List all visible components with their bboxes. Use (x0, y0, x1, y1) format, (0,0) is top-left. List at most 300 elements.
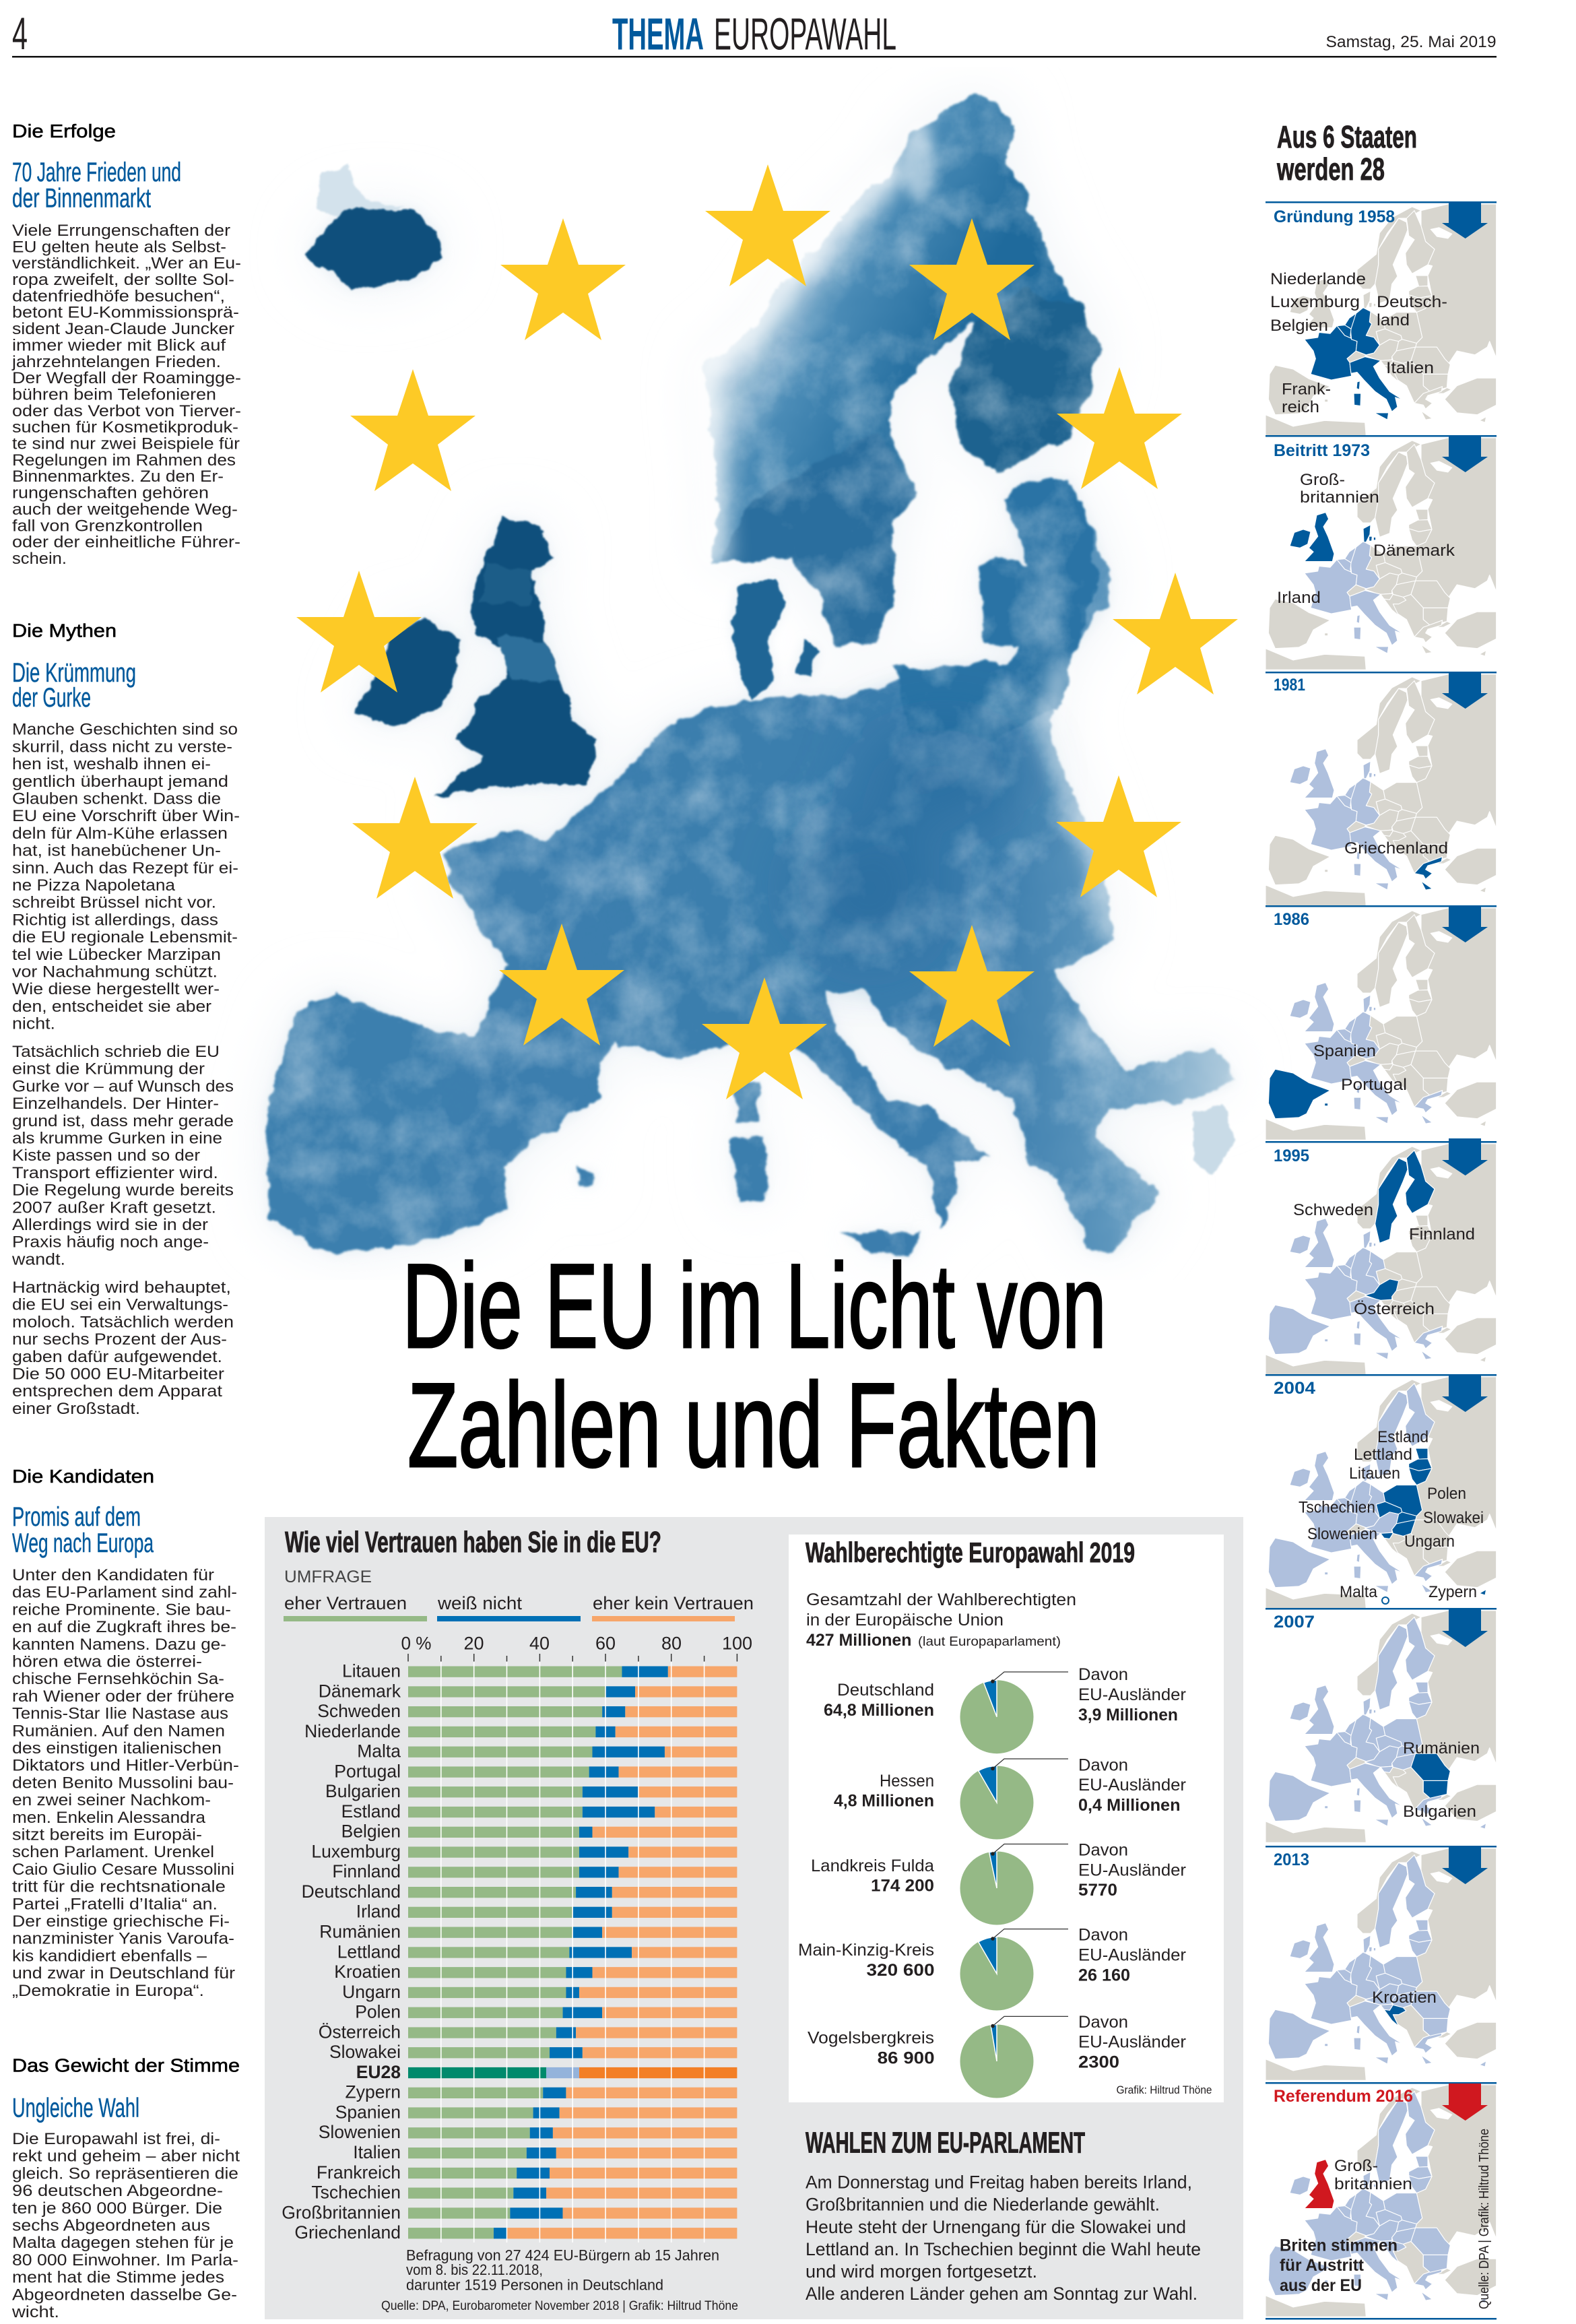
country labels: Belgien (1270, 317, 1328, 335)
row: Luxemburg (311, 1841, 737, 1861)
body text: kannten Namens. Dazu ge- (12, 1636, 226, 1654)
illustration: watercolour map of Europe (266, 96, 1236, 1257)
body text: skurril, dass nicht zu verste- (12, 738, 232, 756)
row: Deutschland pie: Davon (1078, 1665, 1128, 1684)
body text: oder der einheitliche Führer- (12, 534, 240, 552)
country label: Griechenland (1344, 839, 1448, 858)
row: Dänemark (319, 1681, 737, 1701)
arrow (1442, 1138, 1488, 1175)
legend (284, 1593, 754, 1621)
year label: 1995 (1274, 1147, 1309, 1165)
block body: Lettland an. In Tschechien beginnt die Wahl heute (806, 2239, 1201, 2259)
sidebar heading: Aus 6 Staaten (1277, 119, 1417, 154)
body text: „Demokratie in Europa“. (12, 1982, 204, 2000)
body text: nanzminister Yanis Varoufa- (12, 1930, 234, 1948)
kicker: Die Kandidaten (12, 1466, 154, 1487)
block body: Am Donnerstag und Freitag haben bereits Irland, (806, 2172, 1192, 2193)
panel: survey chart Wie viel Vertrauen (282, 1526, 754, 2313)
year label: 1981 (1274, 676, 1305, 695)
row: Frankreich (317, 2162, 737, 2183)
panel: 1986 (1266, 905, 1497, 1140)
body text: ten je 860 000 Bürger. Die (12, 2199, 222, 2218)
body text (11, 2130, 240, 2321)
country labels: Finnland (1409, 1225, 1475, 1244)
source line: Quelle: DPA, Eurobarometer November 2018 | Grafik: Hiltrud Thöne (381, 2298, 738, 2313)
body text: sinn. Auch das Rezept für ei- (12, 859, 238, 877)
row: EU28 (356, 2062, 737, 2082)
headline (12, 658, 136, 713)
country labels (1270, 270, 1447, 416)
section subtitle: EUROPAWAHL (714, 9, 896, 59)
block body: und wird morgen fortgesetzt. (806, 2261, 1037, 2282)
arrow (1442, 672, 1488, 709)
country labels (1313, 1042, 1407, 1094)
body text: Tennis-Star Ilie Nastase aus (12, 1705, 228, 1723)
row: Italien: Italien (353, 2142, 401, 2162)
callout (1280, 2236, 1398, 2295)
body text: vor Nachahmung schützt. (12, 963, 218, 981)
row: Litauen: Litauen (342, 1661, 401, 1681)
body text: chische Fernsehköchin Sa- (12, 1670, 224, 1688)
country labels: Schweden (1293, 1201, 1373, 1219)
body text: nur sechs Prozent der Aus- (12, 1330, 227, 1349)
row: EU28: EU28 (356, 2062, 401, 2082)
body text: Unter den Kandidaten für (12, 1566, 214, 1584)
row: Deutschland pie: 3,9 Millionen (1078, 1706, 1178, 1724)
body text: einer Großstadt. (12, 1400, 140, 1418)
body text: hören etwa die österrei- (12, 1653, 202, 1671)
body text: entsprechen dem Apparat (12, 1382, 222, 1400)
bar chart rows (282, 1661, 737, 2242)
body text: moloch. Tatsächlich werden (12, 1313, 234, 1331)
body text: Kiste passen und so der (12, 1147, 200, 1165)
block body (806, 2172, 1201, 2304)
survey note: darunter 1519 Personen in Deutschland (406, 2277, 663, 2294)
body text: Diktators und Hitler-Verbün- (12, 1757, 239, 1775)
body text: Regelungen im Rahmen des (12, 451, 236, 470)
arrow (1442, 202, 1488, 238)
row: Landkreis Fulda pie (811, 1841, 1186, 1925)
block body: Alle anderen Länder gehen am Sonntag zur Wahl. (806, 2284, 1197, 2304)
body text: sident Jean-Claude Juncker (12, 320, 234, 338)
row: Polen: Polen (355, 2002, 401, 2022)
body text: Viele Errungenschaften der (12, 222, 230, 240)
row: Dänemark: Dänemark (319, 1681, 401, 1701)
map (1266, 1144, 1497, 1376)
row: Schweden: Schweden (317, 1701, 401, 1721)
country label: Kroatien (1372, 1989, 1437, 2007)
row: Hessen pie: Hessen (880, 1772, 934, 1790)
row: Schweden (317, 1701, 737, 1721)
panel: 2007 (1266, 1608, 1497, 1842)
section title: THEMA (612, 9, 704, 59)
article: Die Erfolge (11, 121, 241, 568)
country labels: Litauen (1349, 1464, 1400, 1483)
country labels: Rumänien (1403, 1739, 1480, 1757)
row: Slowenien: Slowenien (319, 2122, 401, 2142)
body text: deten Benito Mussolini bau- (12, 1774, 234, 1792)
row: Kroatien: Kroatien (334, 1962, 401, 1982)
map (1266, 908, 1497, 1140)
row: Slowakei (329, 2042, 737, 2062)
row: Großbritannien: Großbritannien (282, 2202, 401, 2222)
axis labels (401, 1634, 752, 1654)
body text: bühren beim Telefonieren (12, 385, 216, 404)
headline: der Binnenmarkt (12, 183, 151, 213)
total electorate text: 427 Millionen (806, 1631, 912, 1650)
axis labels: 80 (661, 1634, 682, 1654)
legend: weiß nicht (437, 1593, 523, 1613)
row: Italien (353, 2142, 737, 2162)
year label: 2004 (1274, 1379, 1315, 1398)
map (1266, 1848, 1497, 2080)
row: Irland (356, 1902, 737, 1922)
main title: Die EU im Licht von (402, 1239, 1107, 1373)
row: Slowenien (319, 2122, 737, 2142)
map (1266, 1377, 1497, 1609)
body text: gleich. So repräsentieren die (12, 2164, 238, 2183)
body text: Einzelhandels. Der Hinter- (12, 1095, 219, 1113)
body text: des einstigen italienischen (12, 1739, 222, 1757)
row: Zypern (346, 2082, 737, 2102)
row: Landkreis Fulda pie: Landkreis Fulda (811, 1857, 934, 1875)
row: Zypern: Zypern (346, 2082, 401, 2102)
year label: Referendum 2016 (1274, 2087, 1413, 2106)
row: Landkreis Fulda pie: 5770 (1078, 1881, 1117, 1900)
body text: ment hat die Stimme jedes (12, 2269, 224, 2287)
callout: für Austritt (1280, 2256, 1365, 2275)
row: Vogelsbergkreis pie (808, 2013, 1186, 2098)
axis labels: 40 (529, 1634, 550, 1654)
row: Portugal (334, 1761, 737, 1781)
row: Großbritannien (282, 2202, 737, 2222)
body text: deln für Alm-Kühe erlassen (12, 825, 228, 843)
row: Belgien: Belgien (341, 1821, 401, 1842)
body text: nicht. (12, 1015, 55, 1033)
row: Bulgarien: Bulgarien (325, 1781, 401, 1801)
panel: Wahlberechtigte Europawahl 2019 (789, 1535, 1224, 2102)
body text: Abgeordneten dasselbe Ge- (12, 2286, 237, 2304)
row: Vogelsbergkreis pie: Vogelsbergkreis (808, 2029, 934, 2048)
body text: Allerdings wird sie in der (12, 1216, 208, 1234)
country labels: Malta (1340, 1583, 1377, 1601)
body text: gaben dafür aufgewendet. (12, 1348, 222, 1366)
row: Österreich (319, 2022, 737, 2042)
body text: hen ist, weshalb ihnen ei- (12, 755, 211, 773)
body text (12, 1566, 239, 2000)
body text: tel wie Lübecker Marzipan (12, 946, 221, 964)
body text: immer wieder mit Blick auf (12, 336, 226, 354)
row: Lettland (337, 1941, 737, 1962)
EU stars (296, 164, 1238, 1099)
body text: Die Regelung wurde bereits (12, 1182, 234, 1200)
body text: schreibt Brüssel nicht vor. (12, 894, 216, 912)
total electorate text: in der Europäische Union (806, 1611, 1004, 1629)
row: Griechenland: Griechenland (294, 2222, 401, 2242)
country labels: Zypern (1429, 1583, 1477, 1601)
callout: aus der EU (1280, 2276, 1362, 2295)
body text: Partei „Fratelli d’Italia“ an. (12, 1895, 218, 1913)
body text: gentlich überhaupt jemand (12, 773, 228, 791)
body text: Tatsächlich schrieb die EU (12, 1043, 220, 1061)
country labels: Polen (1427, 1485, 1466, 1503)
main title: Zahlen und Fakten (407, 1358, 1100, 1492)
row: Litauen (342, 1661, 737, 1681)
body text: Hartnäckig wird behauptet, (12, 1279, 231, 1297)
body text: 96 deutschen Abgeordne- (12, 2182, 223, 2200)
body text: sitzt bereits im Europäi- (12, 1826, 202, 1844)
year label: 2013 (1274, 1850, 1309, 1869)
country labels: Bulgarien (1403, 1803, 1476, 1821)
body text: Praxis häufig noch ange- (12, 1233, 209, 1252)
country labels: Niederlande (1270, 270, 1366, 288)
map (1266, 438, 1497, 670)
country labels: Groß- (1300, 471, 1345, 489)
body text: auch der weitgehende Weg- (12, 501, 238, 519)
headline: Promis auf dem (12, 1502, 141, 1532)
callout: Briten stimmen (1280, 2236, 1398, 2255)
body text: Der Wegfall der Roamingge- (12, 369, 241, 387)
body text: tritt für die rechtsnationale (12, 1878, 226, 1896)
row: Deutschland pie (824, 1665, 1186, 1753)
country labels (1299, 1428, 1484, 1601)
survey note: Befragung von 27 424 EU-Bürgern ab 15 Jahren (406, 2247, 719, 2263)
body text: als krumme Gurken in eine (12, 1129, 222, 1148)
row: Malta (357, 1741, 737, 1762)
body text: Die Europawahl ist frei, di- (12, 2130, 220, 2148)
arrow (1442, 1846, 1488, 1884)
year label: Beitritt 1973 (1274, 441, 1370, 460)
body text: ne Pizza Napoletana (12, 876, 176, 895)
body text: Gurke vor – auf Wunsch des (12, 1077, 234, 1095)
body text: EU eine Vorschrift über Win- (12, 807, 240, 825)
country label: britannien (1334, 2175, 1412, 2193)
country labels: britannien (1300, 488, 1379, 507)
body text: schein. (12, 550, 67, 568)
panel: Gründung 1958 (1266, 201, 1497, 436)
masthead (12, 8, 1497, 59)
panel heading: Wahlberechtigte Europawahl 2019 (806, 1537, 1135, 1568)
body text: 2007 außer Kraft gesetzt. (12, 1198, 216, 1217)
kicker: Das Gewicht der Stimme (12, 2055, 240, 2076)
body text: und zwar in Deutschland für (12, 1964, 235, 1982)
map (1266, 674, 1497, 906)
country labels: Spanien (1313, 1042, 1376, 1060)
article: Die Kandidaten (12, 1466, 239, 2000)
row: Niederlande: Niederlande (304, 1721, 401, 1741)
body text: Rumänien. Auf den Namen (12, 1722, 225, 1740)
body text: Caio Giulio Cesare Mussolini (12, 1861, 234, 1879)
country labels: Slowenien (1307, 1525, 1377, 1543)
body text: rungenschaften gehören (12, 484, 209, 503)
row: Niederlande (304, 1721, 737, 1741)
headline: 70 Jahre Frieden und (12, 158, 181, 187)
year label: 2007 (1274, 1613, 1315, 1632)
row: Hessen pie: 4,8 Millionen (834, 1792, 934, 1811)
row: Main-Kinzig-Kreis pie (798, 1926, 1186, 2010)
body text: Malta dagegen stehen für je (12, 2234, 234, 2252)
row: Spanien (335, 2102, 737, 2122)
body text: die EU regionale Lebensmit- (12, 928, 238, 946)
body text: wandt. (11, 1250, 65, 1268)
legend: eher kein Vertrauen (593, 1593, 754, 1613)
axis labels: 60 (595, 1634, 616, 1654)
body text: Die 50 000 EU-Mitarbeiter (12, 1365, 224, 1384)
body text: das EU-Parlament sind zahl- (12, 1584, 237, 1602)
row: Bulgarien (325, 1781, 737, 1801)
row: Ungarn: Ungarn (342, 1982, 401, 2002)
row: Slowakei: Slowakei (329, 2042, 401, 2062)
body text: suchen für Kosmetikproduk- (12, 418, 238, 437)
arrow (1442, 2084, 1488, 2121)
body text: Richtig ist allerdings, dass (12, 911, 218, 929)
body text: rah Wiener oder der frühere (12, 1687, 234, 1706)
body text: en auf die Zugkraft ihres be- (12, 1618, 236, 1636)
axis labels: 100 (722, 1634, 752, 1654)
row: Österreich: Österreich (319, 2022, 401, 2042)
headline (12, 1502, 154, 1558)
row: Polen (355, 2002, 737, 2022)
country labels (1403, 1739, 1480, 1821)
body text: schen Parlament. Urenkel (12, 1843, 214, 1861)
row: Frankreich: Frankreich (317, 2162, 401, 2183)
body text: Glauben schenkt. Dass die (12, 789, 221, 808)
row: Luxemburg: Luxemburg (311, 1841, 401, 1861)
row: Estland (341, 1801, 737, 1821)
panel: 1995 (1266, 1138, 1497, 1376)
country labels: Italien (1386, 359, 1434, 377)
country labels (1277, 471, 1455, 607)
headline: Weg nach Europa (12, 1528, 154, 1558)
row: Main-Kinzig-Kreis pie: 26 160 (1078, 1966, 1130, 1984)
row: Finnland (332, 1861, 737, 1881)
row: Lettland: Lettland (337, 1941, 401, 1962)
row: Deutschland pie: 64,8 Millionen (824, 1701, 934, 1720)
row: Kroatien (334, 1962, 737, 1982)
row: Tschechien: Tschechien (311, 2183, 401, 2203)
total electorate text: (laut Europaparlament) (918, 1635, 1061, 1649)
survey note: vom 8. bis 22.11.2018, (406, 2261, 543, 2278)
map (1266, 1611, 1497, 1842)
row: Main-Kinzig-Kreis pie: Davon (1078, 1926, 1128, 1945)
row: Main-Kinzig-Kreis pie: 320 600 (866, 1961, 935, 1980)
map (1266, 204, 1497, 436)
country label: Groß- (1334, 2157, 1378, 2175)
page number: 4 (12, 8, 28, 59)
body text: den, entscheidet sie aber (12, 998, 211, 1016)
panel: 2004 (1266, 1374, 1497, 1609)
row: Main-Kinzig-Kreis pie: Main-Kinzig-Kreis (798, 1941, 934, 1960)
body text: en zwei seiner Nachkom- (12, 1791, 211, 1809)
panel: 2013 (1266, 1846, 1497, 2080)
row: Rumänien: Rumänien (319, 1921, 401, 1941)
body text: hat, ist hanebüchener Un- (12, 842, 221, 860)
country labels: Slowakei (1423, 1509, 1484, 1527)
headline (12, 158, 181, 213)
body text: 80 000 Einwohner. Im Parla- (12, 2251, 238, 2269)
country labels: Dänemark (1373, 542, 1455, 560)
country labels (1293, 1201, 1475, 1318)
country labels: Portugal (1341, 1076, 1407, 1094)
row: Vogelsbergkreis pie: 2300 (1078, 2053, 1119, 2072)
row: Hessen pie: Davon (1078, 1755, 1128, 1774)
body text: einst die Krümmung der (12, 1060, 205, 1078)
body text: verständlichkeit. „Wer an Eu- (12, 255, 241, 273)
body text: kis kandidiert ebenfalls – (12, 1947, 207, 1965)
date: Samstag, 25. Mai 2019 (1325, 33, 1497, 51)
arrow (1442, 906, 1488, 942)
legend: eher Vertrauen (284, 1593, 407, 1613)
country labels: Frank- (1282, 380, 1331, 399)
body text: grund ist, dass mehr gerade (12, 1112, 234, 1130)
country labels: land (1377, 311, 1410, 329)
body text: die EU sei ein Verwaltungs- (12, 1296, 228, 1314)
body text: sechs Abgeordneten aus (12, 2216, 210, 2235)
main title (402, 1239, 1107, 1492)
kicker: Die Mythen (12, 620, 117, 641)
body text: jahrzehntelangen Frieden. (11, 353, 221, 371)
row: Landkreis Fulda pie: EU-Ausländer (1078, 1861, 1186, 1879)
row: Hessen pie: 0,4 Millionen (1078, 1796, 1180, 1815)
body text: Wie diese hergestellt wer- (12, 980, 220, 998)
body text: Manche Geschichten sind so (12, 721, 238, 739)
row: Hessen pie (834, 1755, 1186, 1839)
body text: Binnenmarktes. Zu den Er- (12, 467, 224, 486)
country labels: Irland (1277, 589, 1321, 607)
sidebar heading: werden 28 (1276, 152, 1385, 187)
arrow (1442, 436, 1488, 472)
row: Deutschland (302, 1881, 737, 1902)
row: Vogelsbergkreis pie: Davon (1078, 2013, 1128, 2032)
headline: der Gurke (12, 683, 91, 713)
row: Estland: Estland (341, 1801, 401, 1821)
panel: grey background for survey and election info (265, 1517, 1243, 2319)
body text: Der einstige griechische Fi- (12, 1912, 230, 1931)
row: Malta: Malta (357, 1741, 401, 1762)
row: Hessen pie: EU-Ausländer (1078, 1776, 1186, 1795)
axis labels: 0 % (401, 1634, 431, 1654)
article: Das Gewicht der Stimme (11, 2055, 240, 2321)
text block: Wahlen zum EU-Parlament (806, 2127, 1201, 2304)
chart heading: Wie viel Vertrauen haben Sie in die EU? (285, 1526, 661, 1559)
total electorate text: Gesamtzahl der Wahlberechtigten (806, 1590, 1076, 1609)
year label: Gründung 1958 (1274, 207, 1395, 226)
country labels: Estland (1377, 1428, 1429, 1446)
country labels: Lettland (1354, 1446, 1412, 1464)
body text: fall von Grenzkontrollen (12, 517, 203, 535)
row: Landkreis Fulda pie: 174 200 (871, 1877, 934, 1896)
body text: men. Enkelin Alessandra (12, 1809, 206, 1827)
body text: betont EU-Kommissionsprä- (12, 304, 239, 322)
body text: oder das Verbot von Tierver- (12, 402, 241, 420)
body text: datenfriedhöfe besuchen“, (12, 287, 225, 305)
map (1266, 2085, 1497, 2317)
panel: 1981 (1266, 672, 1497, 906)
country labels: Deutsch- (1377, 293, 1447, 311)
row: Main-Kinzig-Kreis pie: EU-Ausländer (1078, 1946, 1186, 1965)
body text (11, 721, 240, 1418)
body text: EU gelten heute als Selbst- (12, 238, 226, 256)
row: Deutschland pie: Deutschland (837, 1681, 934, 1700)
row: Landkreis Fulda pie: Davon (1078, 1841, 1128, 1860)
arrow (1442, 1375, 1488, 1412)
row: Vogelsbergkreis pie: 86 900 (878, 2049, 935, 2068)
panel: Beitritt 1973 (1266, 435, 1497, 670)
panel: Referendum 2016 (1266, 2082, 1497, 2320)
headline: Ungleiche Wahl (12, 2094, 139, 2123)
row: Griechenland (294, 2222, 737, 2242)
body text: Transport effizienter wird. (12, 1164, 218, 1182)
